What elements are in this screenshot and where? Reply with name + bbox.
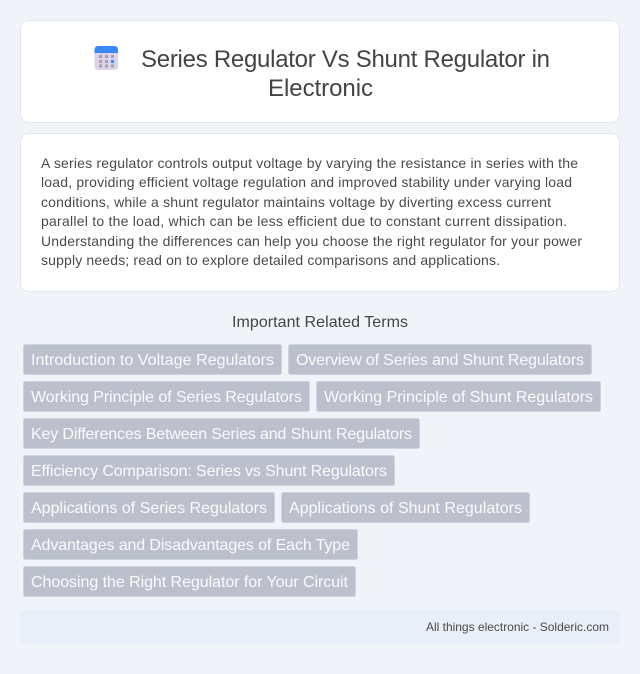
tag: Key Differences Between Series and Shunt Regulators: [31, 426, 412, 443]
tag: Working Principle of Shunt Regulators: [324, 389, 593, 406]
tag: Working Principle of Series Regulators: [31, 389, 302, 406]
tag: [316, 382, 600, 412]
title: Electronic: [268, 75, 373, 102]
footer text: All things electronic - Solderic.com: [426, 620, 609, 634]
tag: [24, 456, 394, 486]
tag: [288, 344, 592, 374]
tag: Applications of Shunt Regulators: [289, 500, 522, 517]
tag: Efficiency Comparison: Series vs Shunt Regulators: [31, 463, 387, 480]
tag: [24, 382, 310, 412]
text: description paragraph: parallel to the load, which can be less efficient due to constant current dissipation.: [41, 213, 567, 229]
tag list: [24, 344, 600, 596]
text: description paragraph: conditions, while a shunt regulator maintains voltage by diverting excess current: [41, 194, 551, 210]
text: description paragraph: load, providing efficient voltage regulation and improved stability under varying load: [41, 174, 572, 190]
title: Series Regulator Vs Shunt Regulator in: [141, 46, 550, 73]
tag: Introduction to Voltage Regulators: [31, 352, 274, 369]
tag: Applications of Series Regulators: [31, 500, 267, 517]
icon: calendar: [94, 46, 118, 70]
text: description paragraph: A series regulator controls output voltage by varying the resistance in series with the: [41, 155, 578, 171]
tag: Advantages and Disadvantages of Each Type: [31, 537, 350, 554]
tag: [24, 344, 282, 374]
text: description paragraph: supply needs; read on to explore detailed comparisons and applications.: [41, 252, 500, 268]
tag: [24, 492, 274, 522]
tag: [282, 492, 530, 522]
panel: title card: [20, 20, 620, 122]
panel: description: [20, 134, 620, 292]
tag: [24, 418, 420, 448]
footer bar: [20, 610, 620, 644]
heading: related terms: Important Related Terms: [232, 314, 408, 331]
tag: Overview of Series and Shunt Regulators: [296, 352, 584, 369]
tag: Choosing the Right Regulator for Your Circuit: [31, 574, 349, 591]
text: description paragraph: Understanding the differences can help you choose the right regulator for your power: [41, 233, 582, 249]
tag: [24, 530, 358, 560]
tag: [24, 566, 356, 596]
